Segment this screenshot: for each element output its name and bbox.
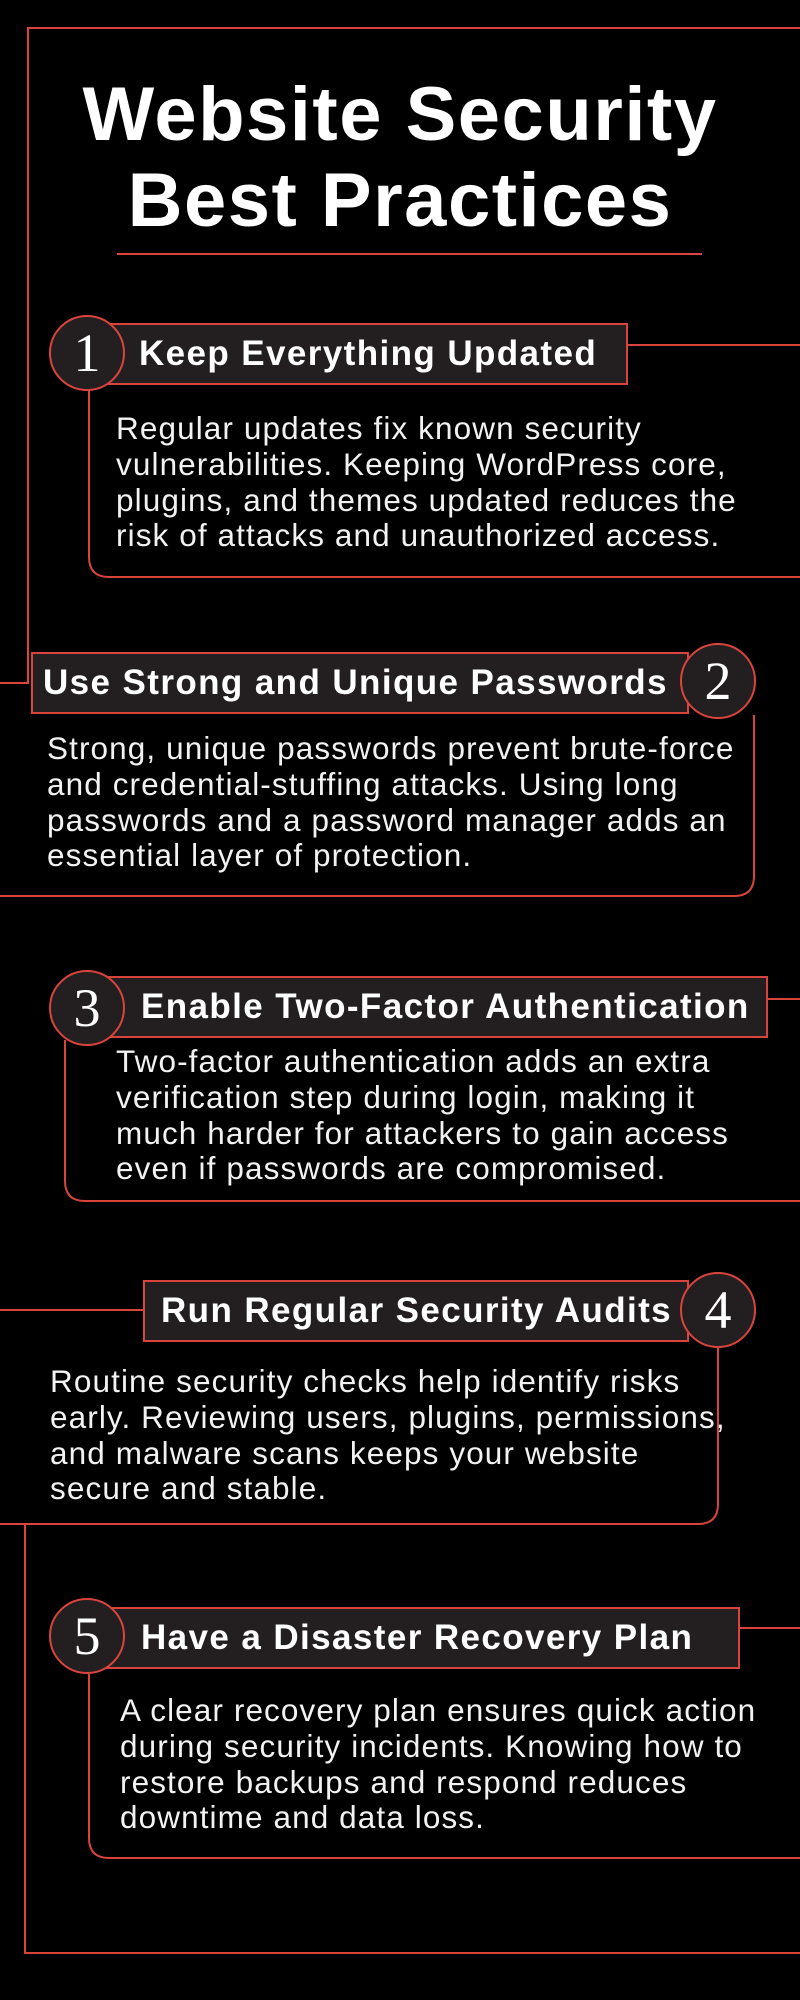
text 3 bbox=[116, 1043, 729, 1186]
number 3 bbox=[49, 970, 125, 1046]
heading 1: Keep Everything Updated bbox=[139, 334, 597, 373]
text 1: vulnerabilities. Keeping WordPress core, bbox=[116, 446, 727, 482]
text 2: essential layer of protection. bbox=[47, 837, 472, 873]
heading 4: Run Regular Security Audits bbox=[161, 1291, 672, 1330]
text 5: downtime and data loss. bbox=[120, 1799, 485, 1835]
text 2: and credential-stuffing attacks. Using long bbox=[47, 766, 679, 802]
heading 5 bbox=[87, 1607, 740, 1669]
text 5: A clear recovery plan ensures quick action bbox=[120, 1692, 756, 1728]
text 4: and malware scans keeps your website bbox=[50, 1435, 639, 1471]
text 1 bbox=[116, 410, 737, 553]
text 3: much harder for attackers to gain access bbox=[116, 1115, 729, 1151]
number 4 bbox=[680, 1272, 756, 1348]
number 3: 3 bbox=[74, 978, 100, 1038]
text 2: Strong, unique passwords prevent brute-force bbox=[47, 730, 735, 766]
number 1 bbox=[49, 315, 125, 391]
number 1: 1 bbox=[74, 323, 100, 383]
text 3: even if passwords are compromised. bbox=[116, 1150, 666, 1186]
text 1: Regular updates fix known security bbox=[116, 410, 642, 446]
text 4 bbox=[50, 1363, 726, 1506]
heading 3: Enable Two-Factor Authentication bbox=[141, 987, 750, 1026]
title underline bbox=[117, 253, 702, 255]
number 5 bbox=[49, 1598, 125, 1674]
heading 1 bbox=[87, 323, 628, 385]
text 4: early. Reviewing users, plugins, permissions, bbox=[50, 1399, 726, 1435]
heading 4 bbox=[143, 1280, 689, 1342]
number 5: 5 bbox=[74, 1606, 100, 1666]
number 2 bbox=[680, 643, 756, 719]
text 4: secure and stable. bbox=[50, 1470, 327, 1506]
text 5: restore backups and respond reduces bbox=[120, 1764, 687, 1800]
text 5 bbox=[120, 1692, 756, 1835]
heading 5: Have a Disaster Recovery Plan bbox=[141, 1618, 693, 1657]
text 1: plugins, and themes updated reduces the bbox=[116, 482, 737, 518]
text 1: risk of attacks and unauthorized access. bbox=[116, 517, 720, 553]
title: Website Security bbox=[82, 72, 718, 157]
number 4: 4 bbox=[704, 1280, 732, 1340]
text 3: Two-factor authentication adds an extra bbox=[116, 1043, 710, 1079]
text 2: passwords and a password manager adds an bbox=[47, 802, 727, 838]
title: Best Practices bbox=[128, 158, 672, 243]
text 2 bbox=[47, 730, 735, 873]
heading 2 bbox=[31, 652, 689, 714]
title bbox=[82, 72, 718, 243]
heading 2: Use Strong and Unique Passwords bbox=[43, 663, 668, 702]
heading 3 bbox=[87, 976, 768, 1038]
number 2: 2 bbox=[704, 651, 732, 711]
text 3: verification step during login, making it bbox=[116, 1079, 695, 1115]
text 5: during security incidents. Knowing how to bbox=[120, 1728, 743, 1764]
text 4: Routine security checks help identify risks bbox=[50, 1363, 680, 1399]
